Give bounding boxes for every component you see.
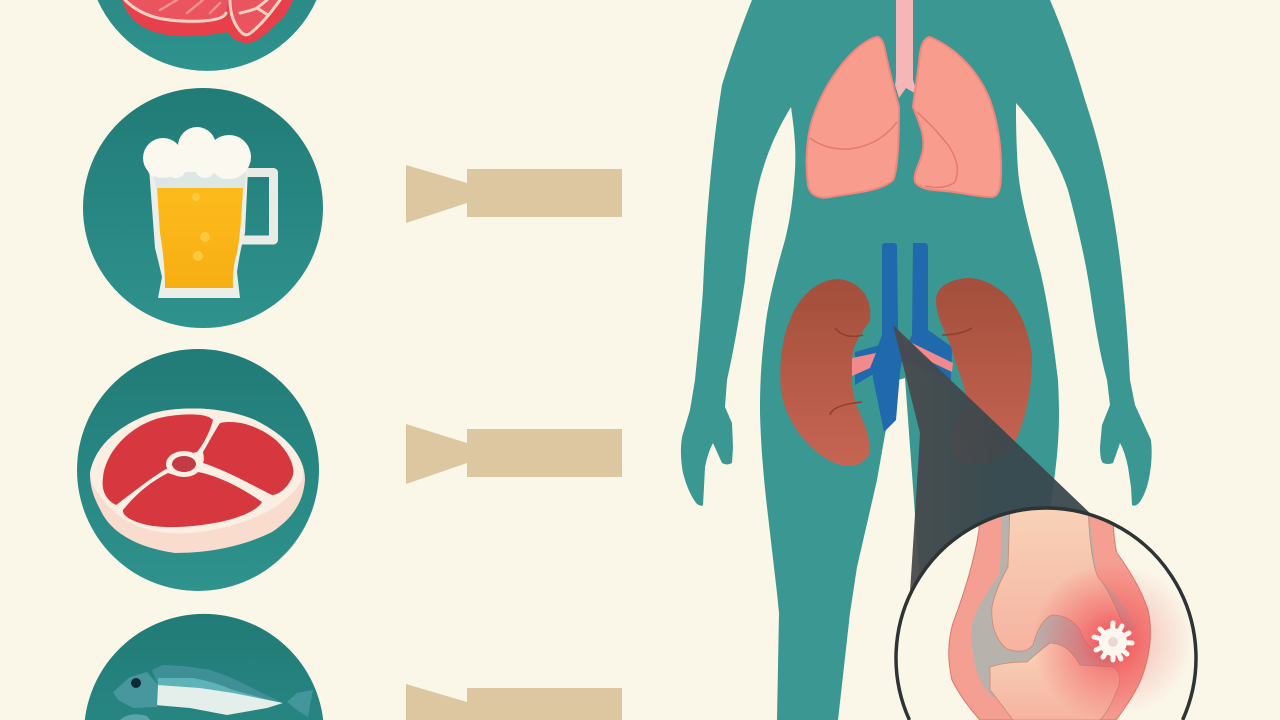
lens ring [896, 508, 1196, 720]
mug glass [149, 168, 248, 298]
mug handle [238, 172, 274, 240]
blood vessels [852, 243, 953, 432]
meat outer edge [122, 0, 293, 43]
cartilage [971, 505, 1135, 697]
vena cava and aorta [871, 243, 905, 432]
steak red sections [103, 414, 293, 527]
left lung [807, 37, 899, 198]
femur bone [992, 505, 1125, 651]
kidney creases [830, 328, 863, 415]
right lung fissure [917, 112, 957, 187]
arrow 2 [406, 424, 622, 484]
left renal vessels [855, 345, 880, 385]
left renal artery [852, 353, 876, 376]
human body silhouette [681, 0, 1152, 720]
marbling [160, 0, 220, 13]
bubbles [192, 193, 210, 261]
fish eye [131, 678, 141, 688]
left lung fissure [810, 122, 897, 149]
lesion burst [1094, 623, 1132, 660]
fish mid band [158, 678, 277, 702]
tibia bone [990, 643, 1120, 720]
foam [143, 127, 251, 179]
meat inner faces [127, 0, 228, 24]
steak fat and side [90, 408, 305, 553]
arrow 3 [406, 684, 622, 720]
fish silver belly [155, 685, 283, 715]
arrow 1 [406, 165, 622, 223]
right renal artery [910, 342, 953, 372]
right lung [913, 37, 1001, 197]
fish back [152, 665, 283, 703]
second fish [120, 714, 150, 720]
steak bone [166, 451, 202, 477]
food circle: red meat cut [98, 0, 316, 71]
food circle: steak [77, 349, 319, 591]
fat lines [125, 0, 280, 35]
inflammation glow [1038, 570, 1150, 714]
fish head [113, 672, 158, 708]
left kidney [780, 279, 870, 466]
beer liquid [157, 188, 243, 288]
food circle: beer mug [83, 88, 323, 328]
fish tail [287, 690, 313, 717]
magnifier cone [893, 325, 1092, 592]
outer halo [1128, 576, 1184, 705]
lungs [807, 0, 1001, 198]
joint capsule [949, 505, 1150, 720]
right kidney [936, 278, 1032, 464]
magnified joint lens [896, 505, 1196, 720]
trachea [895, 0, 918, 98]
food circle: fish [85, 614, 323, 720]
